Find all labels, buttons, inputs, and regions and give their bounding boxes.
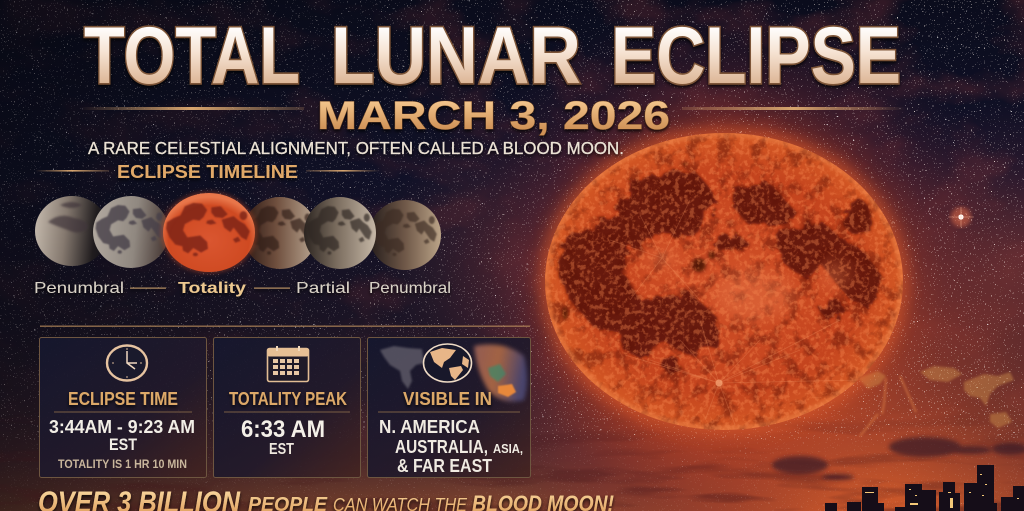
title: TOTAL xyxy=(84,11,300,101)
moon: partial shadow xyxy=(304,197,376,269)
visible regions: ASIA, xyxy=(493,442,523,456)
heading: visible in: VISIBLE IN xyxy=(403,389,492,409)
totality duration: TOTALITY IS 1 HR 10 MIN xyxy=(58,457,187,471)
date heading: MARCH 3, 2026 xyxy=(317,94,670,138)
visible regions: AUSTRALIA, xyxy=(395,437,488,457)
title: LUNAR xyxy=(331,11,581,101)
moon: partial leaving xyxy=(243,197,317,269)
moon: totality xyxy=(161,192,257,274)
est label: EST xyxy=(109,435,138,454)
est label: EST xyxy=(269,441,294,458)
visible regions: & FAR EAST xyxy=(397,456,492,476)
divider xyxy=(40,326,530,327)
icon: calendar xyxy=(268,346,308,382)
title: ECLIPSE xyxy=(611,11,901,101)
city skyline xyxy=(825,465,1024,511)
date rules xyxy=(80,107,906,110)
eclipse timeline heading: ECLIPSE TIMELINE xyxy=(117,162,298,182)
bottom callout xyxy=(38,486,614,511)
eclipse time range: 3:44AM - 9:23 AM xyxy=(49,417,195,437)
phase labels xyxy=(34,280,451,297)
visible regions: N. AMERICA xyxy=(379,417,480,437)
icon: clock xyxy=(107,346,147,380)
icon: globe xyxy=(424,344,472,382)
title xyxy=(84,11,901,101)
bright star xyxy=(948,207,974,227)
phase labels: Penumbral xyxy=(34,280,124,297)
icon: visibility map xyxy=(474,344,527,402)
big blood moon xyxy=(539,126,910,436)
lunar maria xyxy=(557,170,883,371)
cloud banks bottom right xyxy=(772,437,1024,480)
panel: visible in xyxy=(368,338,530,478)
panel: totality peak xyxy=(214,338,360,478)
tagline: A RARE CELESTIAL ALIGNMENT, OFTEN CALLED A BLOOD MOON. xyxy=(88,138,624,158)
visible regions xyxy=(379,417,523,476)
moon: penumbral end xyxy=(369,200,441,270)
moon: penumbral start xyxy=(35,196,109,266)
heading: eclipse time: ECLIPSE TIME xyxy=(68,389,178,409)
moon: partial entering xyxy=(93,196,169,268)
panel: eclipse time xyxy=(40,338,206,478)
bright highlands and rays xyxy=(646,248,850,319)
peak time: 6:33 AM xyxy=(241,416,325,443)
faint world map and constellation over the sky xyxy=(858,366,1014,436)
eclipse phase moons xyxy=(35,192,441,274)
phase labels: Partial xyxy=(296,280,350,297)
phase labels: Penumbral xyxy=(369,280,451,297)
phase labels: Totality xyxy=(178,280,246,297)
heading: totality peak: TOTALITY PEAK xyxy=(229,389,347,409)
icon: grey world map xyxy=(380,346,424,389)
